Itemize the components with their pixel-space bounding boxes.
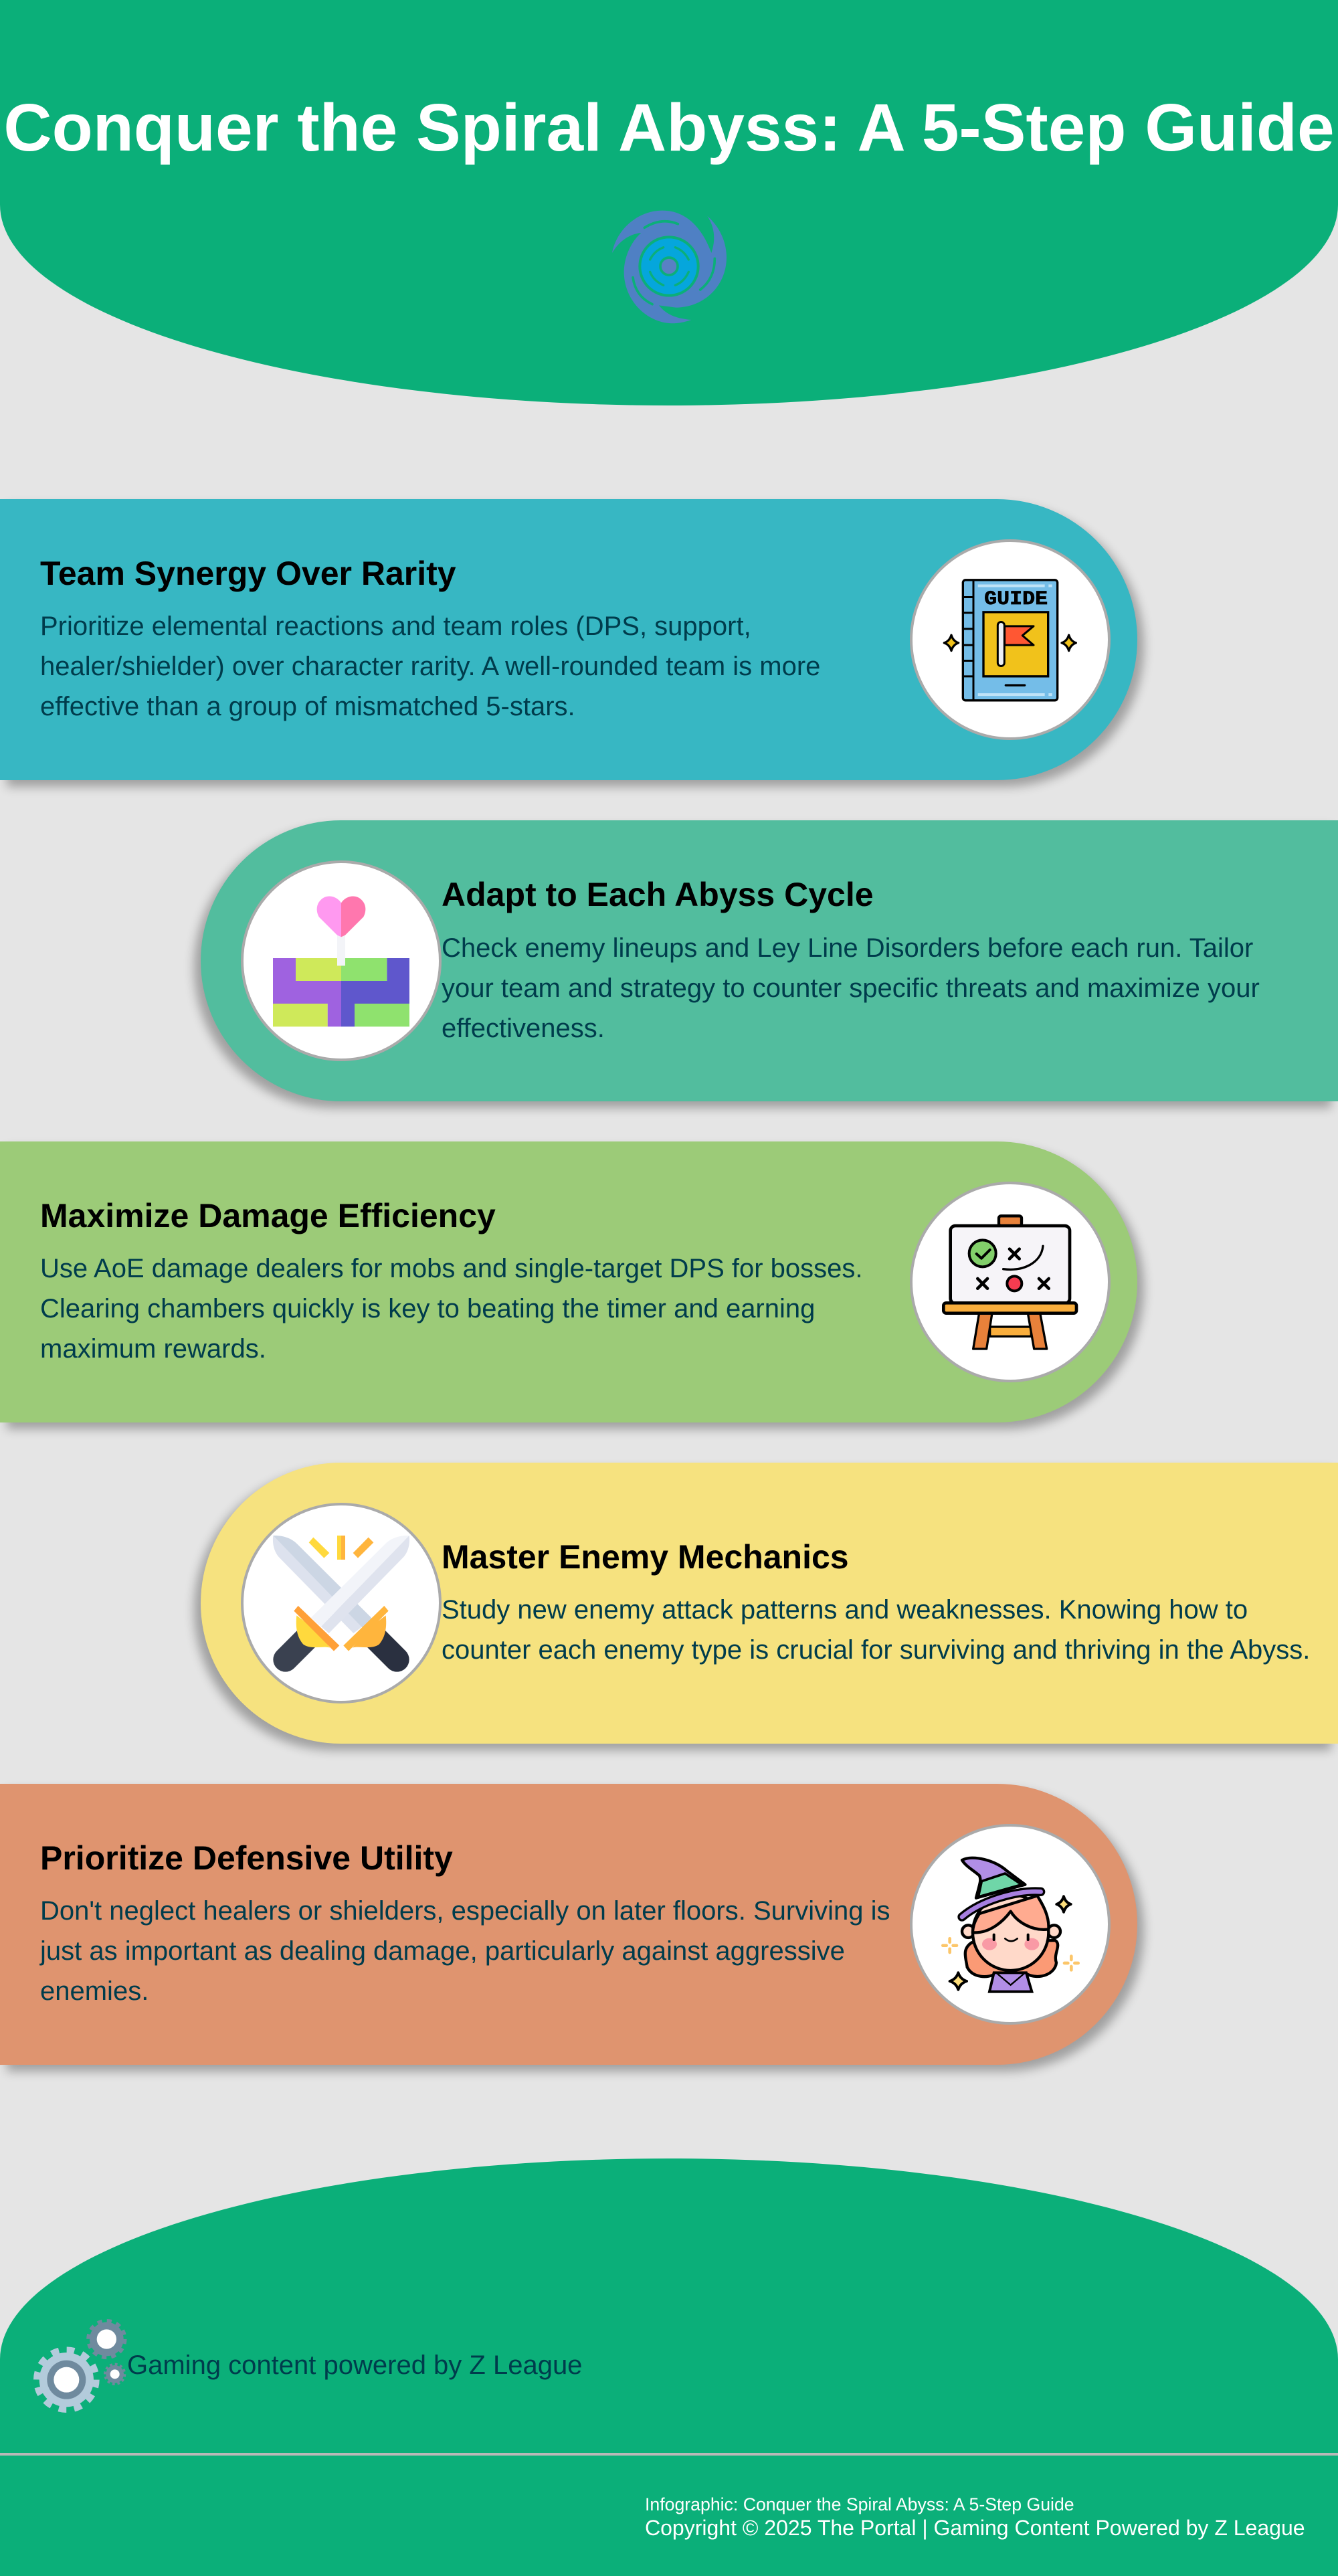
icon: guide book: GUIDE xyxy=(984,588,1048,610)
step 4 heading: Master Enemy Mechanics xyxy=(442,1538,849,1576)
step 4 text: Study new enemy attack patterns and weaknesses. Knowing how to xyxy=(442,1595,1248,1625)
step 3 icon circle xyxy=(910,1182,1111,1382)
step 1 icon circle xyxy=(910,539,1111,740)
footer divider xyxy=(0,2453,1338,2456)
step 2 icon circle xyxy=(241,860,442,1061)
step 3 text: Clearing chambers quickly is key to beating the timer and earning xyxy=(40,1294,815,1323)
footer tagline: Gaming content powered by Z League xyxy=(127,2351,582,2380)
step 1 heading: Team Synergy Over Rarity xyxy=(40,555,456,592)
step 4 icon circle xyxy=(241,1503,442,1704)
step 2 heading: Adapt to Each Abyss Cycle xyxy=(442,876,874,913)
step 5 heading: Prioritize Defensive Utility xyxy=(40,1839,453,1877)
icon: crossed swords xyxy=(273,1536,409,1672)
step 1 text: Prioritize elemental reactions and team roles (DPS, support, xyxy=(40,612,751,641)
step 4 text xyxy=(442,1595,1310,1665)
step 3 heading: Maximize Damage Efficiency xyxy=(40,1197,496,1234)
step 3 text xyxy=(40,1254,863,1364)
step 3 text: maximum rewards. xyxy=(40,1334,266,1364)
title: Conquer the Spiral Abyss: A 5-Step Guide xyxy=(3,90,1335,165)
step 3 text: Use AoE damage dealers for mobs and single-target DPS for bosses. xyxy=(40,1254,863,1283)
step 1 text xyxy=(40,612,820,721)
panel: step 4 mechanics xyxy=(201,1463,1338,1744)
icon: witch character xyxy=(941,1856,1080,1993)
icon: strategy easel xyxy=(942,1214,1078,1350)
icon: guide book xyxy=(943,579,1077,701)
footer infographic title: Infographic: Conquer the Spiral Abyss: A 5-Step Guide xyxy=(645,2494,1074,2514)
header banner xyxy=(0,0,1338,405)
panel: step 2 adapt xyxy=(201,820,1338,1101)
panel: step 5 defense xyxy=(0,1784,1137,2065)
step 5 text xyxy=(39,1896,890,2006)
step 2 text: your team and strategy to counter specific threats and maximize your xyxy=(442,974,1260,1003)
step 1 text: effective than a group of mismatched 5-stars. xyxy=(40,692,575,721)
step 2 text xyxy=(442,933,1260,1043)
icon: gears xyxy=(33,2319,127,2413)
step 2 text: Check enemy lineups and Ley Line Disorders before each run. Tailor xyxy=(442,933,1253,963)
footer copyright: Copyright © 2025 The Portal | Gaming Content Powered by Z League xyxy=(645,2516,1305,2540)
step 5 text: just as important as dealing damage, particularly against aggressive xyxy=(40,1936,845,1966)
icon: maze with heart xyxy=(273,897,409,1026)
icon: spiral abyss vortex xyxy=(612,210,727,324)
step 5 icon circle xyxy=(910,1824,1111,2025)
panel: step 1 team synergy xyxy=(0,499,1137,780)
step 5 text: enemies. xyxy=(40,1976,149,2006)
step 1 text: healer/shielder) over character rarity. A well-rounded team is more xyxy=(40,652,820,681)
step 2 text: effectiveness. xyxy=(442,1014,605,1043)
step 4 text: counter each enemy type is crucial for surviving and thriving in the Abyss. xyxy=(442,1635,1310,1665)
step 5 text: Don't neglect healers or shielders, especially on later floors. Surviving is xyxy=(40,1896,890,1926)
panel: step 3 damage xyxy=(0,1141,1137,1422)
footer banner xyxy=(0,2158,1338,2576)
